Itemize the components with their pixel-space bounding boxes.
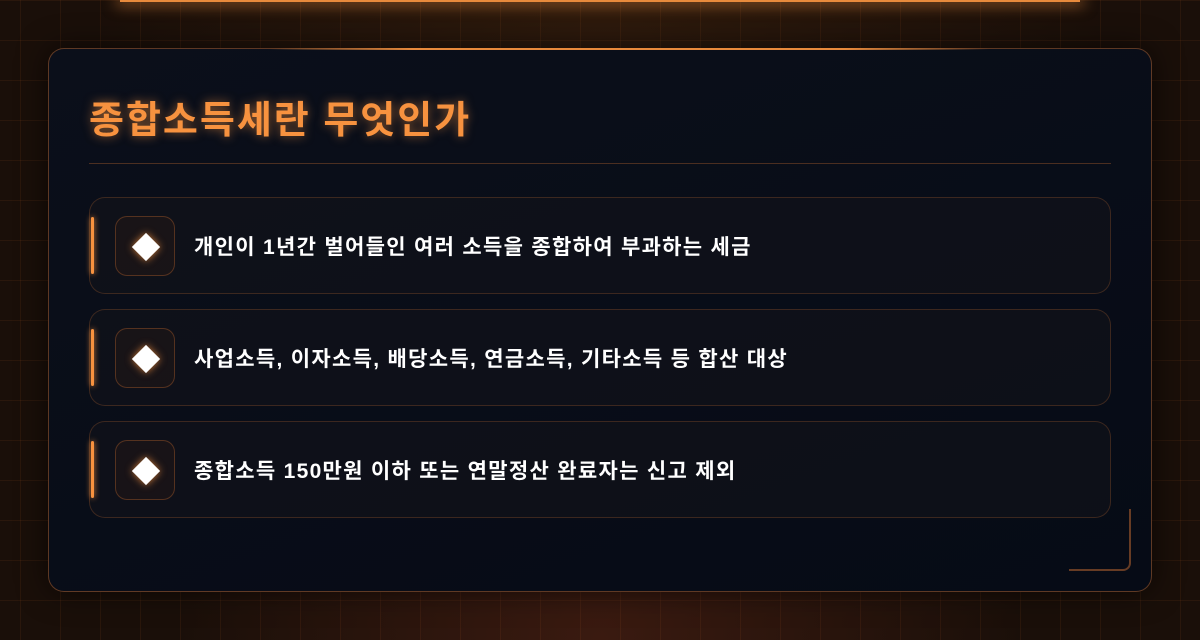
text 3: 종합소득 150만원 이하 또는 연말정산 완료자는 신고 제외 (194, 460, 737, 483)
icon: diamond (115, 328, 175, 388)
item 3 (89, 421, 1111, 518)
panel: main card (48, 48, 1152, 592)
title: 종합소득세란 무엇인가 (89, 100, 471, 142)
icon: diamond (115, 440, 175, 500)
text 1: 개인이 1년간 벌어들인 여러 소득을 종합하여 부과하는 세금 (194, 236, 752, 259)
icon: diamond (115, 216, 175, 276)
item 1 (89, 197, 1111, 294)
text 2: 사업소득, 이자소득, 배당소득, 연금소득, 기타소득 등 합산 대상 (194, 348, 788, 371)
item 2 (89, 309, 1111, 406)
